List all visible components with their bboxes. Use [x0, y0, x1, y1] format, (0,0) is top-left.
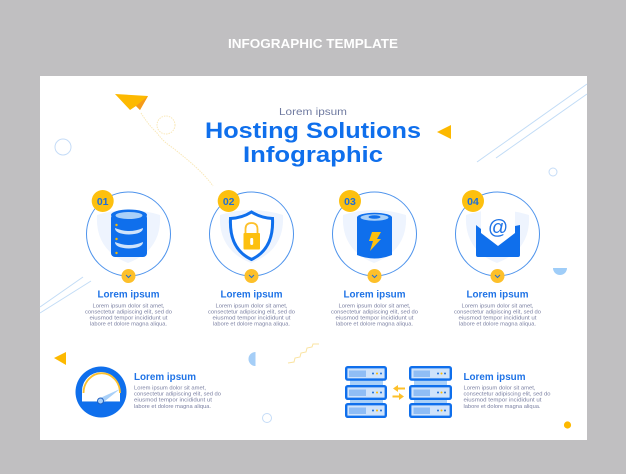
icon: paper plane	[115, 94, 148, 110]
card text: Lorem ipsum	[344, 290, 406, 300]
section text	[134, 372, 221, 410]
badge 02: 02	[223, 196, 235, 208]
chevron badge	[122, 269, 136, 283]
icon: speedometer gauge	[76, 366, 126, 418]
section text: Lorem ipsum dolor sit amet,	[464, 385, 536, 391]
heading: Infographic	[243, 142, 383, 167]
card text: Lorem ipsum	[220, 290, 283, 300]
card text: labore et dolore magna aliqua.	[459, 322, 536, 328]
card text: consectetur adipiscing elit, sed do	[208, 310, 295, 316]
card text	[331, 290, 418, 328]
badge 04: 04	[467, 196, 479, 208]
card text: eiusmod tempor incididunt ut	[458, 316, 537, 322]
card text: consectetur adipiscing elit, sed do	[454, 310, 541, 316]
card text: labore et dolore magna aliqua.	[90, 322, 167, 328]
icon: battery	[357, 213, 392, 258]
template title: INFOGRAPHIC TEMPLATE	[228, 36, 398, 51]
card text	[454, 290, 541, 328]
section text	[464, 372, 550, 410]
icon: database	[111, 210, 147, 257]
heading: Lorem ipsum	[279, 107, 347, 118]
section text: Lorem ipsum dolor sit amet,	[134, 385, 206, 391]
panel: infographic	[40, 76, 587, 440]
card 3: power	[331, 190, 418, 328]
card text: Lorem ipsum	[98, 290, 160, 300]
decoration: lines and shapes	[40, 84, 587, 429]
badge 01: 01	[97, 196, 109, 208]
card text: eiusmod tempor incididunt ut	[336, 316, 414, 322]
section text: consectetur adipiscing elit, sed do	[134, 392, 221, 398]
section text: eiusmod tempor incididunt ut	[134, 398, 212, 404]
card 2: security	[208, 190, 295, 328]
heading	[205, 107, 421, 167]
icon: transfer arrows	[392, 385, 405, 400]
card text: Lorem ipsum	[466, 290, 529, 300]
card text: Lorem ipsum dolor sit amet,	[216, 303, 288, 309]
card text	[208, 290, 295, 328]
card text	[85, 290, 172, 328]
speed section	[76, 366, 221, 418]
chevron badge	[490, 269, 504, 283]
card text: Lorem ipsum dolor sit amet,	[92, 303, 165, 309]
section text: eiusmod tempor incididunt ut	[464, 398, 542, 404]
card text: eiusmod tempor incididunt ut	[90, 316, 168, 322]
chevron badge	[368, 269, 382, 283]
card text: Lorem ipsum dolor sit amet,	[338, 303, 411, 309]
chevron badge	[244, 269, 258, 283]
badge 03: 03	[344, 196, 356, 208]
icon: left server rack	[346, 367, 386, 417]
section text: labore et dolore magna aliqua.	[464, 404, 541, 410]
section text: consectetur adipiscing elit, sed do	[464, 392, 550, 398]
card text: eiusmod tempor incididunt ut	[212, 316, 291, 322]
card 1: database	[85, 190, 172, 328]
section text: Lorem ipsum	[464, 372, 526, 383]
icon: right server rack	[410, 367, 451, 417]
card text: consectetur adipiscing elit, sed do	[85, 310, 172, 316]
card text: Lorem ipsum dolor sit amet,	[462, 303, 534, 309]
section text: labore et dolore magna aliqua.	[134, 404, 211, 410]
icon: shield with lock	[230, 212, 273, 260]
card 4: email	[454, 190, 541, 328]
card text: labore et dolore magna aliqua.	[213, 322, 290, 328]
heading: Hosting Solutions	[205, 118, 421, 143]
section text: Lorem ipsum	[134, 372, 196, 383]
card text: labore et dolore magna aliqua.	[336, 322, 413, 328]
icon: envelope: @	[488, 217, 508, 239]
card text: consectetur adipiscing elit, sed do	[331, 310, 418, 316]
data transfer section	[346, 367, 550, 417]
